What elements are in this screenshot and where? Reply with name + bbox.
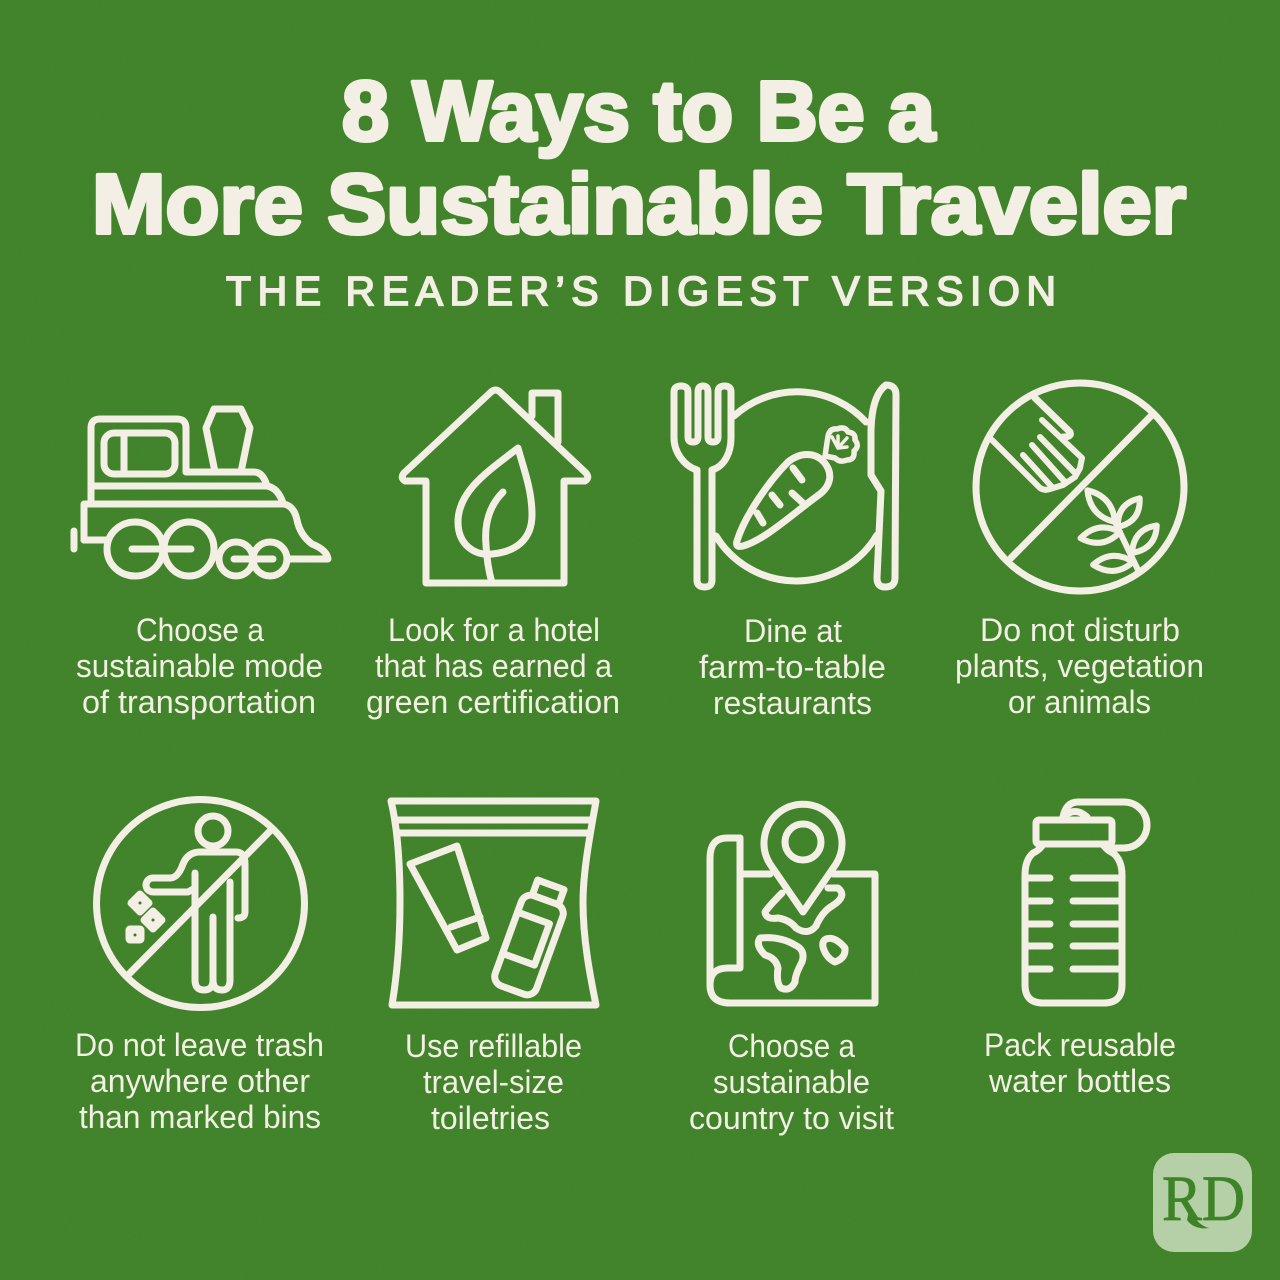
- caption 4: plants, vegetation: [955, 648, 1204, 684]
- title: More Sustainable Traveler: [92, 157, 1186, 251]
- caption 6: Use refillable: [405, 1028, 582, 1064]
- caption 3: restaurants: [713, 685, 872, 721]
- caption 1: Choose a: [136, 612, 264, 648]
- item 6: refillable toiletries: [391, 801, 596, 1136]
- caption 5: Do not leave trash: [75, 1027, 324, 1063]
- caption 8: Pack reusable: [984, 1027, 1176, 1063]
- logo: RD badge: RD: [1162, 1163, 1245, 1235]
- item 2: green hotel: [366, 390, 620, 720]
- caption 3: farm-to-table: [699, 649, 886, 685]
- item 7: sustainable country: [689, 804, 894, 1136]
- item 1: sustainable transportation: [74, 409, 328, 720]
- icon: zip bag with tube and bottle: [391, 801, 596, 1005]
- icon: train: [74, 409, 328, 576]
- icon: map with location pin: [710, 804, 875, 1003]
- icon: water bottle: [1025, 802, 1147, 1003]
- caption 1: [76, 612, 323, 720]
- caption 5: than marked bins: [79, 1099, 321, 1135]
- item 3: farm-to-table dining: [674, 385, 896, 721]
- caption 8: [984, 1027, 1176, 1099]
- icon: house with leaf: [402, 390, 588, 583]
- icon: prohibited hand and plant: [976, 383, 1184, 591]
- caption 8: water bottles: [988, 1063, 1171, 1099]
- caption 7: sustainable: [713, 1064, 870, 1100]
- item 8: reusable bottles: [984, 802, 1176, 1099]
- caption 4: [955, 612, 1204, 720]
- caption 2: [366, 612, 620, 720]
- caption 1: of transportation: [82, 684, 316, 720]
- caption 4: or animals: [1008, 684, 1151, 720]
- caption 5: [75, 1027, 324, 1135]
- caption 7: Choose a: [728, 1028, 855, 1064]
- item 5: no litter: [75, 800, 324, 1135]
- icon: prohibited littering: [96, 800, 304, 1008]
- title: 8 Ways to Be a: [342, 64, 936, 158]
- caption 5: anywhere other: [90, 1063, 310, 1099]
- caption 6: toiletries: [431, 1100, 550, 1136]
- caption 7: [689, 1028, 894, 1136]
- title: [92, 64, 1186, 251]
- caption 7: country to visit: [689, 1100, 894, 1136]
- caption 4: Do not disturb: [980, 612, 1180, 648]
- caption 6: travel-size: [423, 1064, 564, 1100]
- icon: plate, fork, knife and carrot: [674, 385, 896, 587]
- caption 2: that has earned a: [375, 648, 612, 684]
- caption 1: sustainable mode: [76, 648, 323, 684]
- caption 3: [699, 613, 886, 721]
- subtitle: THE READER’S DIGEST VERSION: [226, 268, 1056, 314]
- item 4: do not disturb: [955, 383, 1204, 720]
- caption 3: Dine at: [744, 613, 842, 649]
- caption 6: [405, 1028, 582, 1136]
- caption 2: Look for a hotel: [388, 612, 600, 648]
- logo: RD badge: [1153, 1153, 1252, 1252]
- caption 2: green certification: [366, 684, 620, 720]
